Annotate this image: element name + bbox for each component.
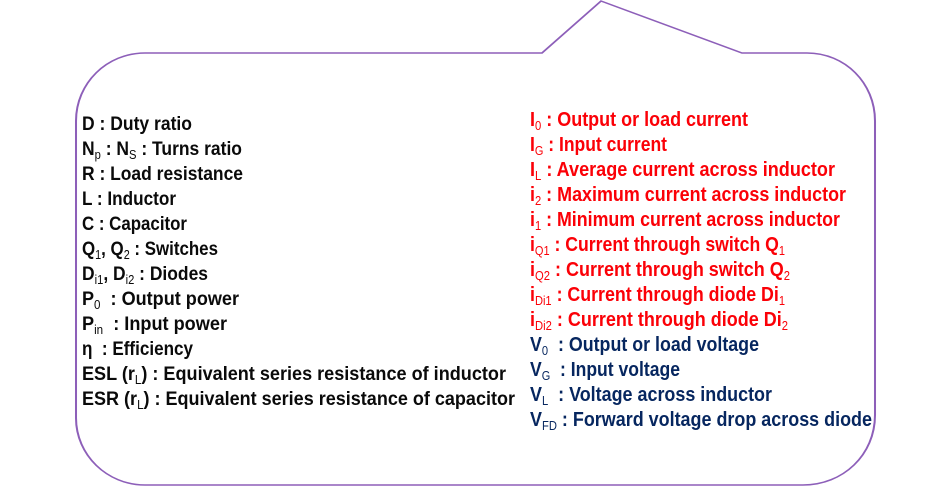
I0: 0 (535, 119, 541, 133)
Q1 Q2: : Switches (130, 238, 218, 260)
iQ2: Q2 (535, 269, 550, 283)
iQ2: 2 (784, 269, 790, 283)
ESL: ) : Equivalent series resistance of inductor (141, 363, 506, 385)
I0: I (530, 109, 536, 131)
right list: currents (530, 109, 846, 333)
Di1 Di2: i2 (126, 273, 134, 287)
Np Ns: N (82, 138, 96, 160)
Np Ns: S (129, 148, 136, 162)
left list: circuit parameters (82, 113, 515, 412)
i2: : Maximum current across inductor (541, 184, 846, 206)
i1: : Minimum current across inductor (541, 209, 840, 231)
Di1 Di2: , D (103, 263, 126, 285)
eta: η : Efficiency (82, 338, 193, 360)
V0: : Output or load voltage (548, 334, 759, 356)
i1: 1 (535, 219, 541, 233)
iDi1: i (530, 284, 536, 306)
i2: i (530, 184, 536, 206)
IG: I (530, 134, 536, 156)
iDi1: : Current through diode Di (552, 284, 779, 306)
iQ1: : Current through switch Q (550, 234, 779, 256)
Pin: in (94, 323, 103, 337)
P0: 0 (94, 298, 101, 312)
iQ2: : Current through switch Q (550, 259, 784, 281)
iDi1: 1 (779, 294, 785, 308)
IL: : Average current across inductor (541, 159, 835, 181)
Np Ns: p (95, 148, 101, 162)
Q1 Q2: , Q (101, 238, 124, 260)
VFD: : Forward voltage drop across diode (557, 409, 872, 431)
ESL: ESL (r (82, 363, 139, 385)
VFD: V (530, 409, 543, 431)
P0: P (82, 288, 95, 310)
Np Ns: : Turns ratio (136, 138, 242, 160)
ESR: ESR (r (82, 388, 142, 410)
right list: voltages (530, 334, 872, 433)
VL: : Voltage across inductor (548, 384, 772, 406)
Np Ns: : N (101, 138, 129, 160)
iQ2: i (530, 259, 536, 281)
VFD: FD (542, 419, 557, 433)
ESL: L (135, 373, 141, 387)
C: C : Capacitor (82, 213, 187, 235)
iDi2: i (530, 309, 536, 331)
Q1 Q2: Q (82, 238, 97, 260)
Q1 Q2: 1 (95, 248, 101, 262)
iDi2: Di2 (535, 319, 552, 333)
iDi2: 2 (782, 319, 788, 333)
Pin: P (82, 313, 95, 335)
Di1 Di2: D (82, 263, 96, 285)
Pin: : Input power (103, 313, 227, 335)
iQ1: 1 (779, 244, 785, 258)
IG: G (535, 144, 543, 158)
P0: : Output power (101, 288, 239, 310)
ESR: ) : Equivalent series resistance of capacitor (144, 388, 515, 410)
i1: i (530, 209, 536, 231)
VL: L (542, 394, 548, 408)
VG: : Input voltage (550, 359, 680, 381)
VG: V (530, 359, 543, 381)
IL: I (530, 159, 536, 181)
I0: : Output or load current (541, 109, 748, 131)
VL: V (530, 384, 543, 406)
ESR: L (137, 398, 144, 412)
VG: G (542, 369, 550, 383)
IL: L (535, 169, 541, 183)
V0: 0 (542, 344, 548, 358)
IG: : Input current (543, 134, 667, 156)
Q1 Q2: 2 (124, 248, 130, 262)
D: D : Duty ratio (82, 113, 192, 135)
iQ1: i (530, 234, 536, 256)
L: L : Inductor (82, 188, 176, 210)
Di1 Di2: : Diodes (134, 263, 208, 285)
i2: 2 (535, 194, 541, 208)
Di1 Di2: i1 (95, 273, 103, 287)
V0: V (530, 334, 543, 356)
iQ1: Q1 (535, 244, 550, 258)
iDi2: : Current through diode Di (552, 309, 782, 331)
iDi1: Di1 (535, 294, 552, 308)
R: R : Load resistance (82, 163, 243, 185)
